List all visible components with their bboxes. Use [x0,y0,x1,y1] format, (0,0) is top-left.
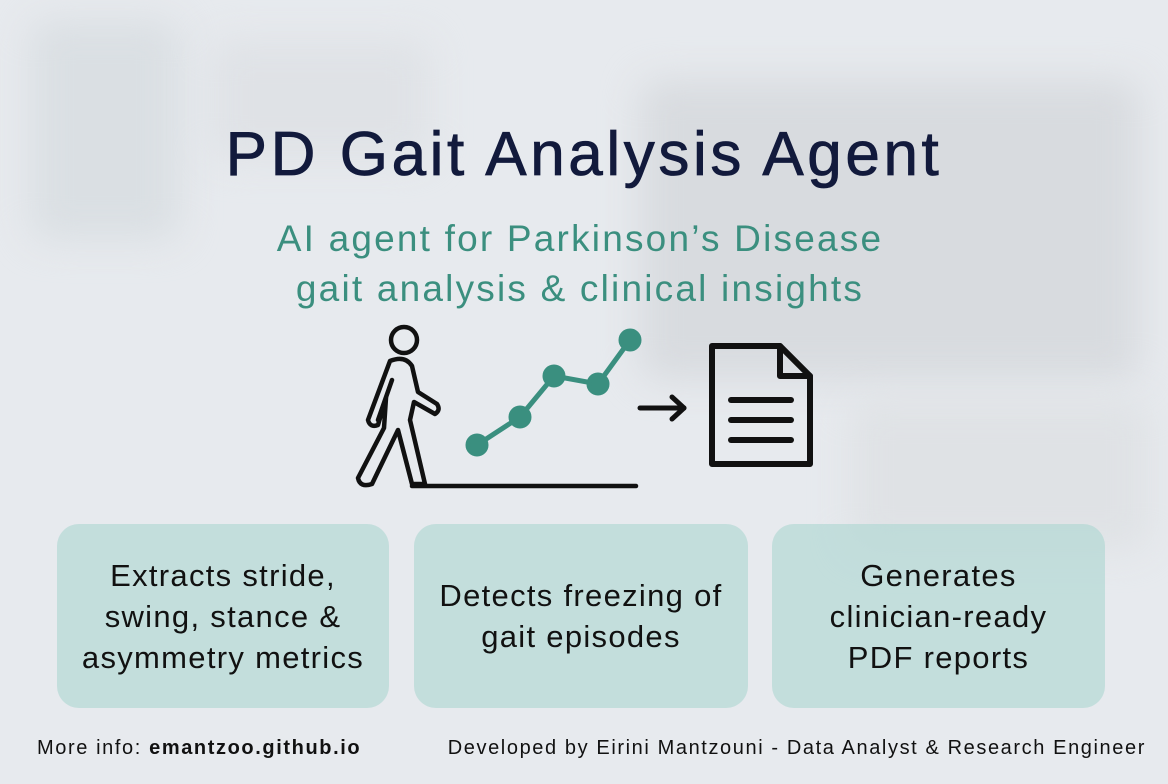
chart: trend line [468,331,639,454]
card: freezing [414,524,748,708]
arrow [640,397,684,419]
icon: walking person [358,327,636,486]
card: freezing: Detects freezing of [439,578,723,613]
subtitle: gait analysis & clinical insights [296,268,864,309]
card: reports: Generates [860,558,1017,592]
footer: more info: More info: emantzoo.github.io [37,737,361,759]
card: reports [772,524,1105,708]
subtitle: AI agent for Parkinson’s Disease [277,218,883,259]
footer: developer: Developed by Eirini Mantzouni - Data Analyst & Research Engineer [448,737,1146,759]
icon: document [712,346,810,464]
card: reports: PDF reports [848,640,1029,674]
card: metrics [57,524,389,708]
card: reports: clinician-ready [830,598,1047,634]
card: metrics: swing, stance & [105,598,341,634]
card: metrics: asymmetry metrics [82,640,364,674]
card: freezing: gait episodes [481,619,681,654]
title: PD Gait Analysis Agent [226,120,942,189]
subtitle [276,218,883,309]
card: metrics: Extracts stride, [110,558,336,592]
